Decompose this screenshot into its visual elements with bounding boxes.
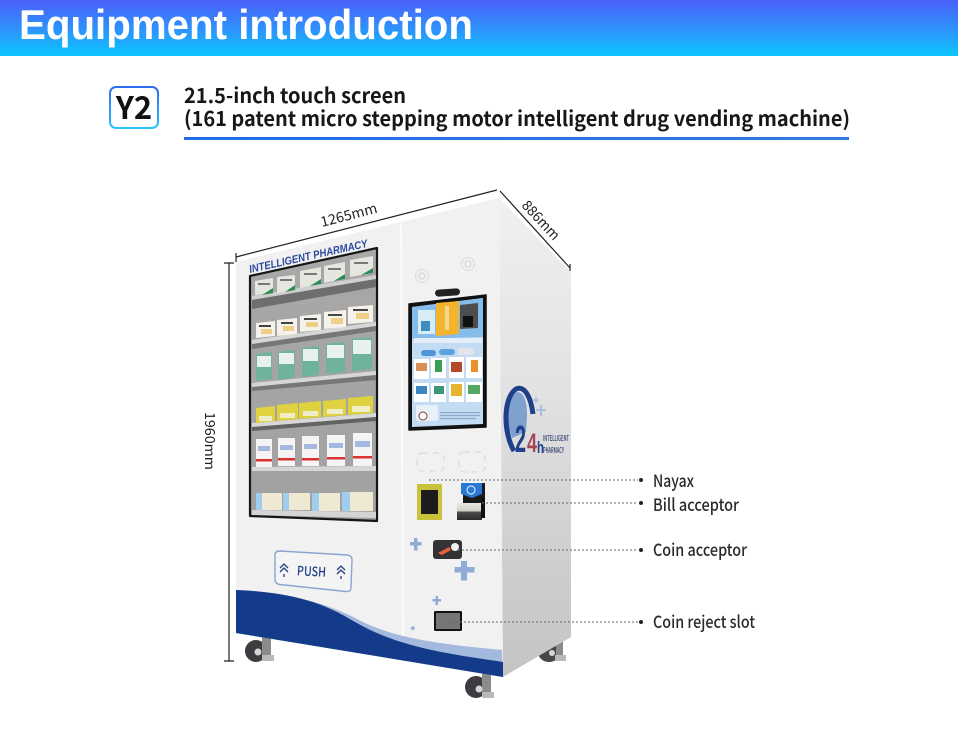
push arrow left	[280, 564, 288, 577]
shelves	[252, 275, 376, 518]
header title: Equipment introduction	[19, 1, 473, 48]
product heading: 21.5-inch touch screen	[184, 79, 406, 109]
product heading: (161 patent micro stepping motor intelligent drug vending machine)	[184, 102, 850, 132]
callout: Coin reject slot	[448, 608, 755, 633]
caster left	[245, 632, 274, 662]
window brand text: INTELLIGENT PHARMACY	[248, 238, 370, 276]
width dimension 1265mm: 1265mm	[318, 198, 379, 232]
callout: Bill acceptor	[482, 491, 739, 516]
screen product cards	[414, 357, 482, 402]
side logo 24h	[506, 388, 569, 461]
height dimension 1960mm: 1960mm	[200, 412, 220, 470]
depth dimension 886mm	[500, 191, 570, 271]
push panel	[275, 551, 352, 592]
decorative plus marks	[410, 538, 474, 630]
nayax reader	[417, 484, 442, 520]
caster wheels	[245, 632, 566, 698]
touch screen	[409, 295, 486, 430]
bill acceptor	[457, 483, 485, 520]
side logo 24h: h	[537, 438, 544, 457]
vending machine	[236, 198, 571, 677]
coin acceptor	[433, 540, 462, 559]
nayax outline marks	[417, 452, 485, 472]
side logo 24h: PHARMACY	[543, 445, 564, 456]
base wave navy band	[236, 590, 503, 677]
product heading	[184, 79, 850, 140]
callout: Nayax	[429, 467, 694, 492]
screen background	[412, 298, 483, 427]
products row 3	[256, 337, 372, 381]
camera	[435, 288, 460, 297]
callout: Coin acceptor	[458, 536, 747, 561]
depth dimension 886mm: 886mm	[517, 196, 565, 245]
base wave light band	[236, 590, 503, 677]
front face door divider	[400, 223, 404, 642]
products row 1	[255, 256, 373, 295]
push panel: PUSH	[297, 560, 327, 581]
coin reject slot	[434, 611, 462, 631]
side logo 24h: 2	[515, 419, 526, 461]
screen buttons	[421, 350, 436, 356]
width dimension 1265mm	[236, 190, 497, 262]
products row 5	[256, 433, 372, 467]
height dimension 1960mm	[200, 263, 234, 661]
push arrow right	[337, 566, 345, 579]
products row 6	[256, 492, 373, 511]
caster right	[538, 636, 566, 662]
products row 2	[256, 305, 373, 338]
logo brand text: INTELLIGENT	[543, 433, 569, 444]
header banner	[0, 0, 958, 56]
side logo 24h: 4	[527, 428, 537, 458]
machine front face	[236, 198, 503, 677]
callout: Nayax: Nayax	[653, 467, 694, 492]
callout: Coin reject slot: Coin reject slot	[653, 608, 755, 633]
screen footer	[416, 405, 438, 421]
callout: Coin acceptor: Coin acceptor	[653, 536, 747, 561]
display window	[248, 238, 377, 521]
screen banner	[412, 298, 483, 339]
speakers	[416, 258, 474, 282]
products row 4	[256, 396, 373, 423]
machine side face	[499, 198, 571, 677]
model badge Y2: Y2	[115, 83, 152, 128]
caster centre	[465, 670, 494, 698]
callout: Bill acceptor: Bill acceptor	[653, 491, 739, 516]
